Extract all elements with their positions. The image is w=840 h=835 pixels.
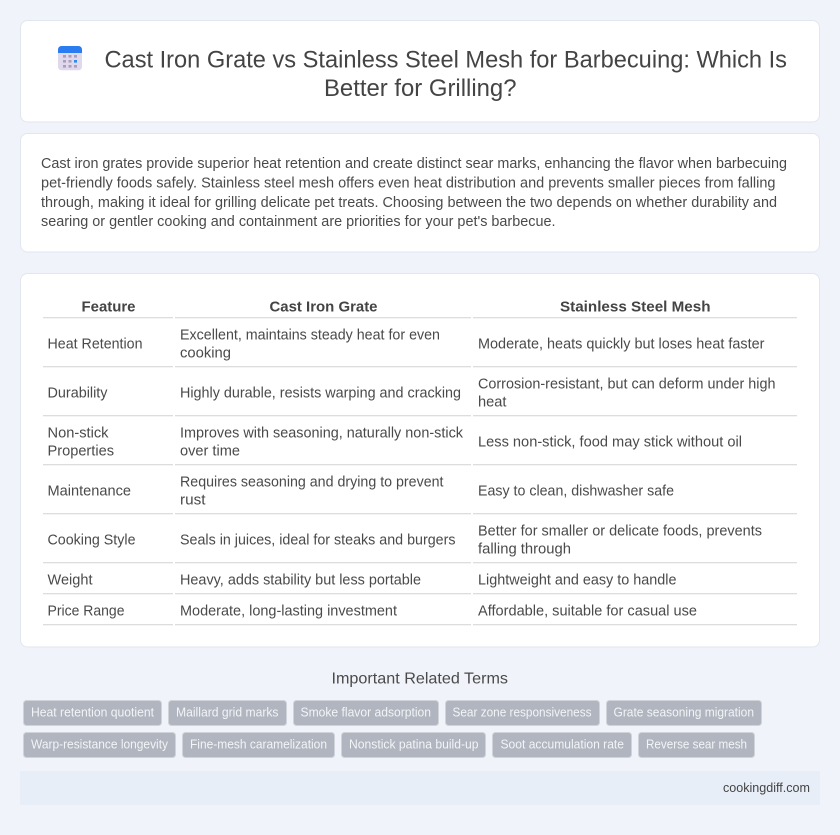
row: cooking style: falling through bbox=[478, 541, 571, 557]
title: Better for Grilling? bbox=[324, 75, 516, 102]
row: price range: Moderate, long-lasting investment bbox=[180, 603, 397, 619]
row: non-stick properties: Properties bbox=[48, 443, 114, 459]
row: price range: Affordable, suitable for casual use bbox=[478, 603, 697, 619]
tag: warp-resistance longevity: Warp-resistance longevity bbox=[31, 738, 169, 752]
row: non-stick properties: over time bbox=[180, 443, 240, 459]
row: maintenance bbox=[43, 474, 797, 514]
tag: reverse sear mesh: Reverse sear mesh bbox=[646, 738, 747, 752]
row: cooking style: Cooking Style bbox=[48, 532, 136, 548]
tag: nonstick patina build-up: Nonstick patina build-up bbox=[349, 738, 478, 752]
panel: title card bbox=[20, 20, 820, 122]
tag: fine-mesh caramelization bbox=[182, 732, 334, 758]
row: non-stick properties: Improves with seasoning, naturally non-stick bbox=[180, 425, 464, 441]
tag: grate seasoning migration bbox=[606, 700, 762, 726]
tag: heat retention quotient bbox=[24, 700, 162, 726]
panel: comparison table bbox=[20, 274, 820, 647]
table header row: Feature bbox=[82, 299, 136, 316]
row: weight: Heavy, adds stability but less portable bbox=[180, 572, 421, 588]
row: weight: Lightweight and easy to handle bbox=[478, 572, 676, 588]
tag: nonstick patina build-up bbox=[342, 732, 486, 758]
table header row: Cast Iron Grate bbox=[270, 299, 378, 316]
tag: soot accumulation rate bbox=[492, 732, 632, 758]
row: heat retention bbox=[43, 327, 797, 367]
panel: introduction text: through, making it ideal for grilling delicate pet treats. Choosing between the two depends on whether durability and bbox=[41, 195, 777, 211]
footer bar: cookingdiff.com bbox=[723, 780, 810, 795]
row: heat retention: Heat Retention bbox=[48, 336, 142, 352]
row: maintenance: Maintenance bbox=[48, 483, 131, 499]
icon: calendar bbox=[58, 46, 82, 70]
panel: introduction text bbox=[20, 134, 820, 252]
row: heat retention: Excellent, maintains steady heat for even bbox=[180, 327, 440, 343]
row: durability: Durability bbox=[48, 385, 108, 401]
row: durability: heat bbox=[478, 394, 506, 410]
panel: introduction text: searing or gentler cooking and containment are priorities for your pet's barbecue. bbox=[41, 214, 556, 230]
row: weight: Weight bbox=[48, 572, 92, 588]
row: heat retention: Moderate, heats quickly but loses heat faster bbox=[478, 336, 765, 352]
row: durability bbox=[43, 376, 797, 416]
tag: maillard grid marks bbox=[168, 700, 286, 726]
row: price range bbox=[43, 603, 797, 625]
row: maintenance: Easy to clean, dishwasher safe bbox=[478, 483, 674, 499]
tag: smoke flavor adsorption bbox=[294, 700, 438, 726]
tag: sear zone responsiveness: Sear zone responsiveness bbox=[452, 706, 592, 720]
row: cooking style: Better for smaller or delicate foods, prevents bbox=[478, 523, 762, 539]
row: maintenance: rust bbox=[180, 492, 206, 508]
tag: reverse sear mesh bbox=[638, 732, 754, 758]
panel: introduction text: Cast iron grates provide superior heat retention and create distinct sear marks, enhancing the flavor when barbecuing bbox=[41, 156, 787, 172]
row: price range: Price Range bbox=[48, 603, 124, 619]
row: durability: Highly durable, resists warping and cracking bbox=[180, 385, 461, 401]
table header row bbox=[43, 299, 797, 318]
heading: important related terms: Important Related Terms bbox=[332, 670, 508, 687]
panel: introduction text: pet-friendly foods safely. Stainless steel mesh offers even heat distribution and prevents smaller pieces from falling bbox=[41, 176, 776, 192]
row: non-stick properties bbox=[43, 425, 797, 465]
title: Cast Iron Grate vs Stainless Steel Mesh for Barbecuing: Which Is bbox=[104, 46, 787, 74]
row: weight bbox=[43, 572, 797, 594]
row: cooking style: Seals in juices, ideal for steaks and burgers bbox=[180, 532, 456, 548]
row: heat retention: cooking bbox=[180, 345, 231, 361]
tag: warp-resistance longevity bbox=[24, 732, 176, 758]
tag list: related terms bbox=[24, 700, 762, 758]
row: cooking style bbox=[43, 523, 797, 563]
footer bar bbox=[20, 771, 820, 805]
tag: soot accumulation rate: Soot accumulation rate bbox=[500, 738, 624, 752]
row: non-stick properties: Non-stick bbox=[48, 425, 109, 441]
title bbox=[104, 46, 787, 102]
tag: maillard grid marks: Maillard grid marks bbox=[176, 706, 278, 720]
table header row: Stainless Steel Mesh bbox=[560, 299, 710, 316]
tag: fine-mesh caramelization: Fine-mesh caramelization bbox=[190, 738, 327, 752]
row: non-stick properties: Less non-stick, food may stick without oil bbox=[478, 434, 742, 450]
tag: smoke flavor adsorption: Smoke flavor adsorption bbox=[300, 706, 431, 720]
tag: grate seasoning migration: Grate seasoning migration bbox=[614, 706, 754, 720]
tag: heat retention quotient: Heat retention quotient bbox=[31, 706, 154, 720]
row: durability: Corrosion-resistant, but can deform under high bbox=[478, 376, 776, 392]
tag: sear zone responsiveness bbox=[446, 700, 600, 726]
row: maintenance: Requires seasoning and drying to prevent bbox=[180, 474, 444, 490]
